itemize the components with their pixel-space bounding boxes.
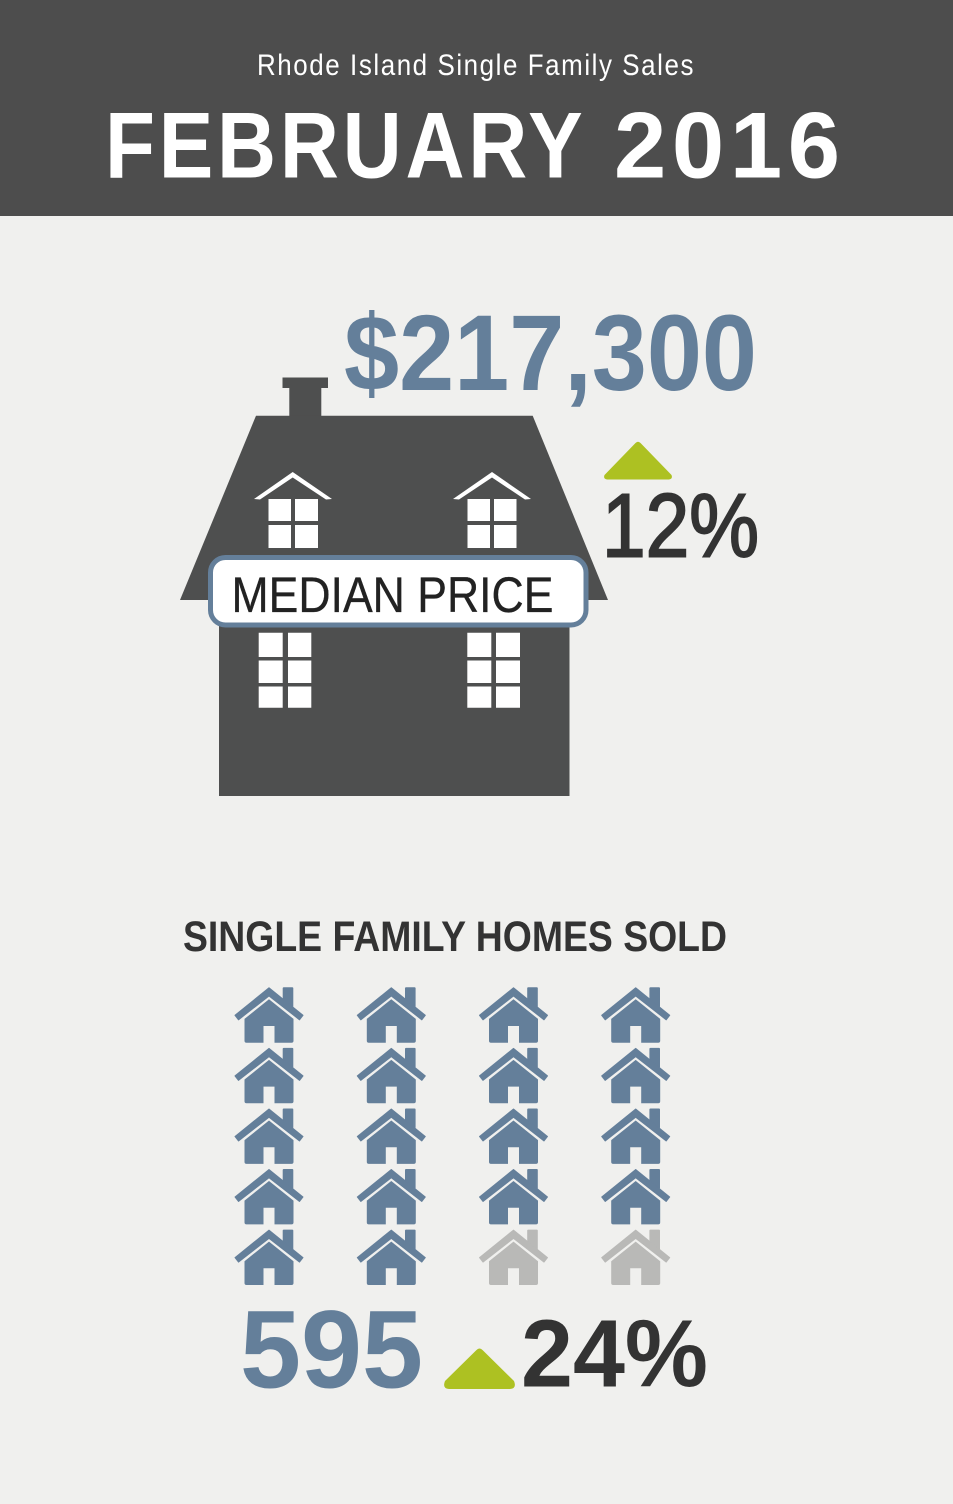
house illustration <box>180 378 608 796</box>
median price value: $217,300 <box>344 292 757 413</box>
left lower window <box>259 633 311 708</box>
up arrow: sales <box>444 1348 515 1389</box>
homes sold count: 595 <box>240 1288 423 1412</box>
homes sold heading: SINGLE FAMILY HOMES SOLD <box>183 913 727 961</box>
up arrow: price <box>604 442 672 480</box>
median price label: MEDIAN PRICE <box>232 567 554 623</box>
header band <box>0 0 953 216</box>
column 4 houses <box>602 987 670 1224</box>
title: 2016 <box>614 92 840 198</box>
column 1 houses <box>235 987 303 1285</box>
price change: 12% <box>602 476 759 576</box>
sales change: 24% <box>521 1300 708 1408</box>
title <box>105 92 840 198</box>
column 3 houses <box>480 987 548 1224</box>
pictogram grid of houses <box>235 987 670 1285</box>
right dormer window <box>453 472 531 548</box>
left dormer window <box>254 472 332 548</box>
grey houses <box>480 1230 670 1285</box>
column 2 houses <box>357 987 425 1285</box>
right lower window <box>467 633 520 708</box>
title: FEBRUARY <box>105 92 583 198</box>
subtitle: Rhode Island Single Family Sales <box>257 48 693 81</box>
roof <box>180 416 608 600</box>
chimney <box>282 378 328 420</box>
house body <box>219 598 570 796</box>
